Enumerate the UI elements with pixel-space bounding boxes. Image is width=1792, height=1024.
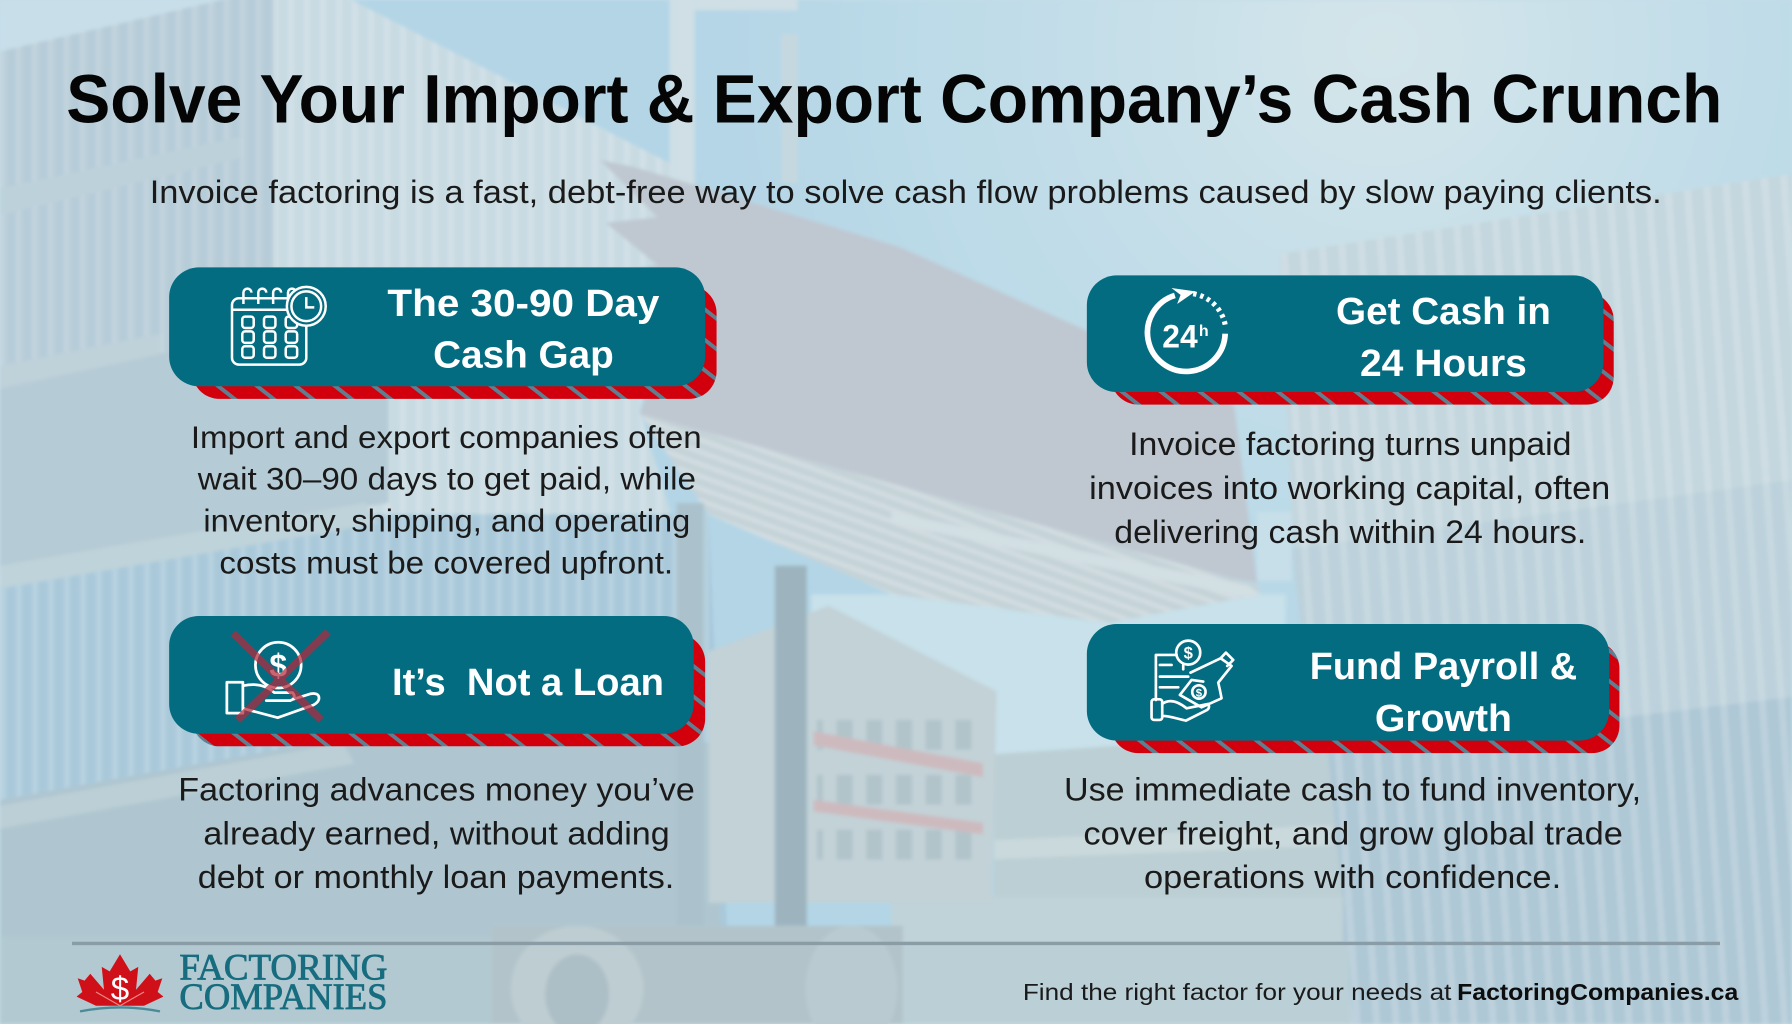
- card 1 heading: Cash Gap: [433, 333, 614, 376]
- icon: 24 hour clock: [1147, 288, 1225, 371]
- icon: maple leaf with dollar: $: [111, 971, 129, 1008]
- card 1 banner: [169, 267, 705, 386]
- card 4 heading: Growth: [1375, 697, 1512, 740]
- icon: 24 hour clock: 24: [1162, 318, 1198, 354]
- text block: 24 hours body: Invoice factoring turns unpaid: [1129, 426, 1571, 462]
- logo wordmark: FACTORING: [179, 946, 387, 987]
- icon: 24 hour clock: h: [1199, 323, 1209, 340]
- text block: not a loan body: [178, 772, 695, 895]
- card 4 heading: [1310, 645, 1577, 740]
- text block: cash gap body: Import and export companies often: [191, 420, 702, 455]
- panel: it's not a loan: [169, 616, 705, 746]
- card 3 striped shadow: [192, 634, 705, 746]
- card 3 banner: [169, 616, 694, 734]
- logo: Factoring Companies: [77, 946, 387, 1017]
- icon: crossed out hand with coin: [227, 632, 328, 720]
- card 1 heading: [387, 282, 660, 376]
- icon: calendar with clock: [232, 287, 326, 365]
- logo wordmark: [179, 946, 387, 1017]
- icon: hand with money and invoice: $: [1184, 644, 1194, 663]
- text block: fund payroll body: Use immediate cash to fund inventory,: [1064, 772, 1641, 808]
- text block: 24 hours body: delivering cash within 24 hours.: [1114, 514, 1586, 550]
- card 4 heading: Fund Payroll &: [1310, 645, 1577, 688]
- text block: cash gap body: costs must be covered upfront.: [219, 546, 673, 581]
- panel: get cash in 24 hours: [1087, 275, 1614, 405]
- card 1 heading: The 30-90 Day: [387, 282, 660, 325]
- icon: hand with money and invoice: [1152, 641, 1233, 721]
- subtitle: Invoice factoring is a fast, debt-free way to solve cash flow problems caused by slow paying clients.: [150, 174, 1662, 210]
- text block: fund payroll body: [1064, 772, 1641, 895]
- icon: maple leaf with dollar: [77, 954, 163, 1011]
- text block: 24 hours body: invoices into working capital, often: [1089, 470, 1610, 506]
- text block: cash gap body: inventory, shipping, and operating: [203, 503, 690, 538]
- title: Solve Your Import & Export Company’s Cash Crunch: [66, 60, 1722, 137]
- text block: fund payroll body: cover freight, and grow global trade: [1083, 816, 1623, 852]
- icon: crossed out hand with coin: $: [269, 648, 287, 684]
- card 2 heading: [1336, 290, 1551, 385]
- panel: 30-90 day cash gap: [169, 267, 717, 399]
- footer call to action: FactoringCompanies.ca: [1457, 979, 1739, 1005]
- icon: hand with money and invoice: $: [1196, 687, 1203, 699]
- text block: 24 hours body: [1089, 426, 1610, 550]
- footer divider: [72, 942, 1720, 945]
- card 1 striped shadow: [192, 286, 717, 399]
- card 2 striped shadow: [1111, 293, 1614, 405]
- text block: not a loan body: debt or monthly loan payments.: [198, 859, 674, 895]
- footer call to action: Find the right factor for your needs at: [1023, 979, 1452, 1005]
- footer call to action: [1023, 979, 1739, 1005]
- card 4 striped shadow: [1111, 641, 1619, 753]
- text block: fund payroll body: operations with confidence.: [1144, 859, 1561, 895]
- card 2 banner: [1087, 275, 1603, 392]
- panel: fund payroll and growth: [1087, 624, 1619, 753]
- card 4 banner: [1087, 624, 1609, 741]
- text block: cash gap body: wait 30–90 days to get paid, while: [197, 462, 696, 497]
- card 2 heading: 24 Hours: [1360, 342, 1527, 385]
- card 2 heading: Get Cash in: [1336, 290, 1551, 333]
- text block: cash gap body: [191, 420, 702, 581]
- logo wordmark: COMPANIES: [179, 976, 387, 1017]
- text block: not a loan body: already earned, without adding: [203, 816, 670, 852]
- text block: not a loan body: Factoring advances money you’ve: [178, 772, 695, 808]
- card 3 heading: It’s Not a Loan: [392, 661, 664, 704]
